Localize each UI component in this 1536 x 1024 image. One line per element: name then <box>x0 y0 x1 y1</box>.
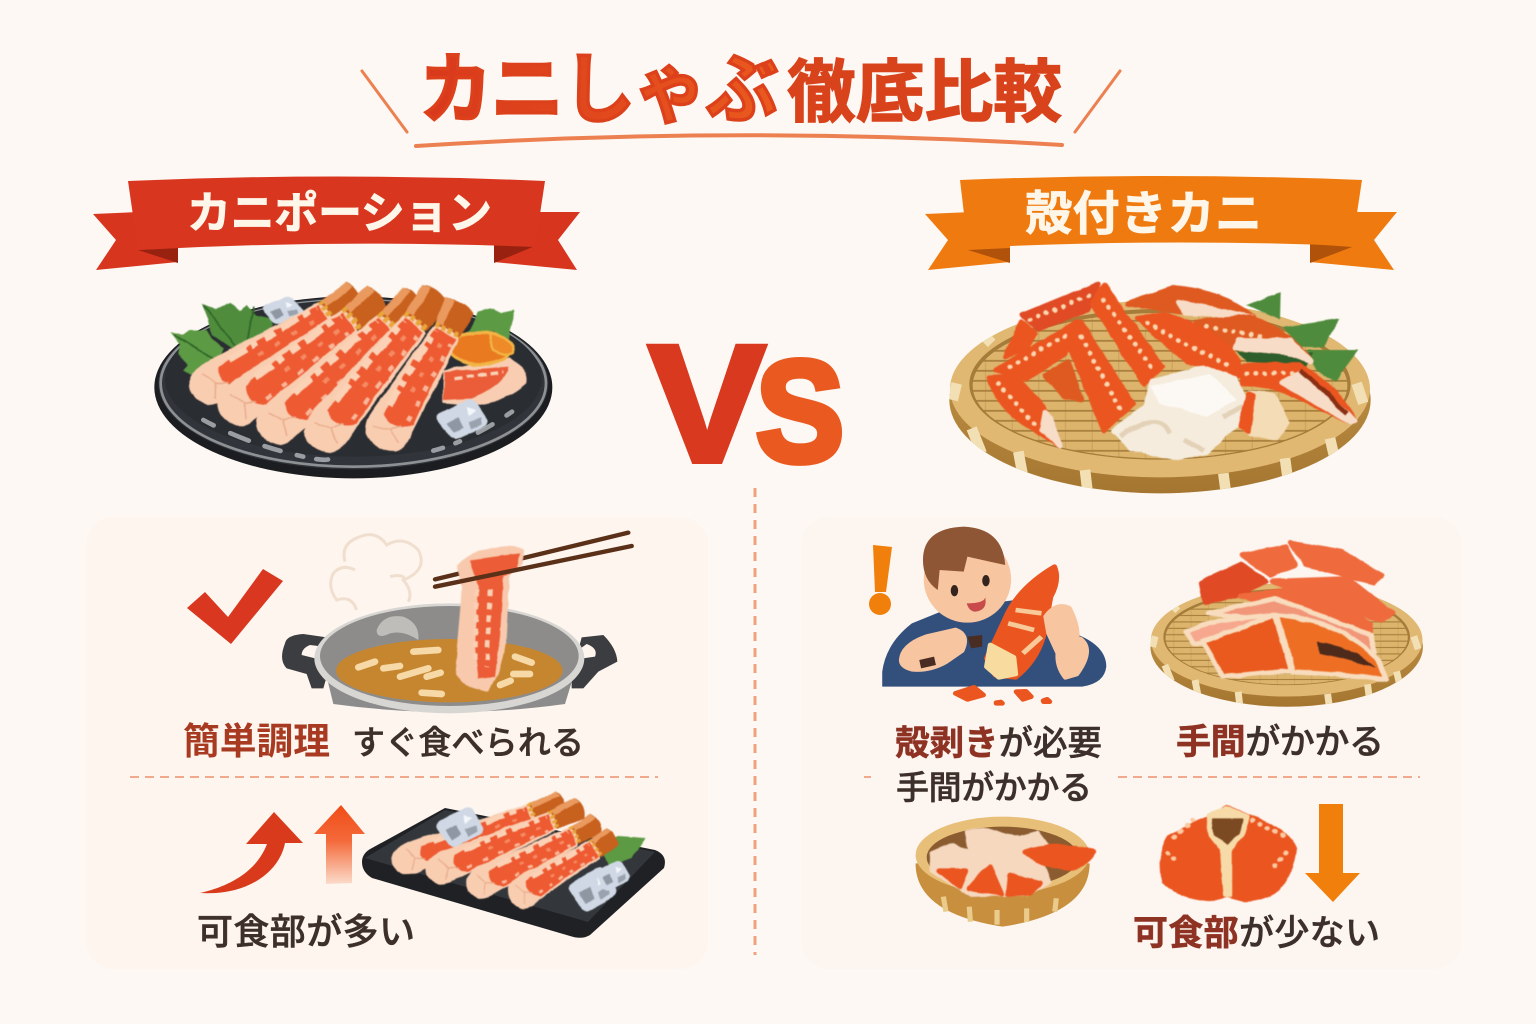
icon: down arrow <box>1305 804 1360 902</box>
banner: カニポーション <box>93 176 580 270</box>
banner: カニポーション: カニポーション <box>187 189 492 238</box>
text: shell peeling required: 殻剥きが必要 <box>895 725 1102 763</box>
illustration: claws on bamboo tray <box>1150 542 1423 710</box>
illustration: wooden bowl with crab meat <box>916 817 1094 927</box>
illustration: crab portions on black plate <box>154 277 552 478</box>
text: little edible meat: 可食部が少ない <box>1133 914 1380 953</box>
title underline and accents <box>362 71 1120 146</box>
banner: 殻付きカニ <box>925 176 1397 270</box>
text: easy cooking: 簡単調理 <box>183 721 330 762</box>
text: shell peeling required, takes effort <box>895 725 1102 806</box>
text: ready to eat: すぐ食べられる <box>352 724 584 761</box>
divider <box>130 776 658 778</box>
VS mark: S <box>756 331 844 492</box>
divider <box>864 776 1420 778</box>
icon: exclamation mark <box>869 545 892 615</box>
title <box>362 48 1120 146</box>
text: takes effort, right: 手間がかかる <box>1176 723 1384 762</box>
panel: カニポーション merits <box>86 517 708 969</box>
icon: straight up arrow <box>314 805 365 884</box>
illustration: crab portions on square tray <box>362 788 665 938</box>
center dashed divider <box>754 488 756 955</box>
illustration: crab dipped in hot pot <box>282 533 632 713</box>
title text: カニしゃぶ <box>420 48 778 133</box>
illustration: shell-on crab on bamboo tray <box>949 284 1371 498</box>
title text: thorough comparison: 徹底比較 <box>787 55 1062 131</box>
text: takes effort: 手間がかかる <box>896 769 1092 806</box>
icon: curved up arrow <box>200 812 303 893</box>
VS mark <box>649 312 844 497</box>
text: lots of edible meat: 可食部が多い <box>197 911 415 952</box>
banner: 殻付きカニ: 殻付きカニ <box>1025 187 1262 240</box>
panel: 殻付きカニ drawbacks <box>801 517 1462 969</box>
icon: check mark <box>187 569 283 644</box>
illustration: crab shell <box>1163 807 1294 899</box>
VS mark: V <box>649 312 765 497</box>
illustration: person cracking crab shell <box>882 527 1106 703</box>
